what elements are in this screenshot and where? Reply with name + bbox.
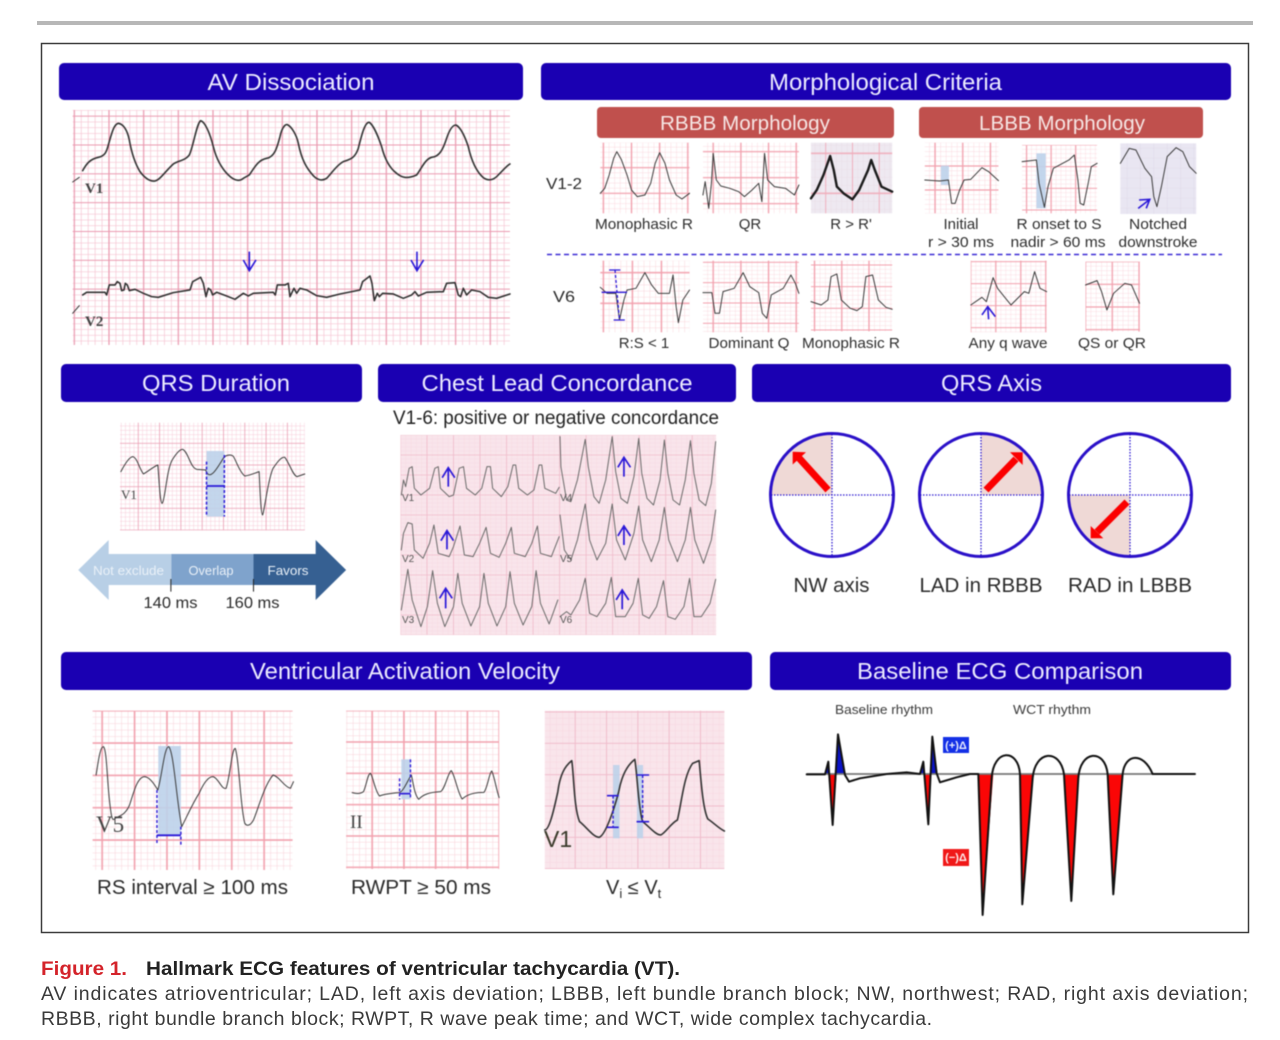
ECG: Monophasic R, V6 RBBB — [811, 261, 892, 331]
label: Monophasic R: Monophasic R — [595, 216, 693, 233]
tag: negative delta: (−)Δ — [945, 852, 967, 864]
heading: QRS Axis: QRS Axis — [941, 370, 1042, 396]
double arrow: QRS duration scale: Favors — [268, 563, 309, 578]
heading: Morphological Criteria: Morphological Criteria — [769, 69, 1002, 95]
heading: Ventricular Activation Velocity — [61, 652, 752, 690]
double arrow: QRS duration scale: 160 ms — [226, 595, 280, 612]
label: R > R': R > R' — [830, 216, 872, 233]
ECG: V1 QRS width: V1 — [121, 487, 137, 502]
panel: QRS duration — [61, 364, 362, 612]
ECG: RS interval, V5: V5 — [96, 812, 124, 837]
axis wheel: LAD in RBBB — [920, 434, 1042, 556]
tag: positive delta — [943, 737, 969, 753]
schematic ECG with positive and negative deltas — [807, 734, 1195, 915]
panel: QRS axis — [752, 364, 1231, 597]
label: Initial r > 30 ms: Initial — [943, 216, 979, 233]
subheading: RBBB Morphology: RBBB Morphology — [660, 113, 830, 135]
panel: ventricular activation velocity — [61, 652, 752, 901]
heading: Morphological Criteria — [541, 63, 1231, 100]
axis wheel: NW axis — [770, 434, 894, 556]
ECG: R > R', V1-2 RBBB — [811, 143, 892, 213]
ECG: RWPT, lead II — [346, 711, 499, 869]
label: R onset to S nadir > 60 ms — [1010, 216, 1106, 251]
label: Vi less than or equal to Vt: i — [619, 886, 622, 901]
panel: morphological criteria — [541, 63, 1231, 352]
12-lead ECG: V1 to V6 concordance: V6 — [560, 615, 573, 626]
divider between V1-2 and V6 rows — [547, 254, 1222, 256]
heading: AV Dissociation: AV Dissociation — [208, 69, 374, 95]
label: RWPT: RWPT ≥ 50 ms — [351, 877, 491, 899]
heading: Baseline ECG Comparison: Baseline ECG Comparison — [857, 658, 1143, 684]
double arrow: QRS duration scale — [78, 540, 346, 612]
ECG: V1 QRS width — [120, 423, 305, 530]
subheading: RBBB Morphology — [597, 107, 894, 138]
label: NW axis: NW axis — [794, 575, 870, 597]
double arrow: QRS duration scale: 140 ms — [144, 595, 198, 612]
double arrow: QRS duration scale: Overlap — [188, 563, 234, 578]
ECG: QS or QR, V6 LBBB — [1086, 262, 1140, 332]
ECG: RS interval, V5 — [93, 711, 293, 870]
panel: chest lead concordance — [378, 364, 736, 635]
12-lead ECG: V1 to V6 concordance — [400, 435, 716, 635]
ECG: RWPT, lead II: II — [350, 812, 363, 833]
12-lead ECG: V1 to V6 concordance: V5 — [560, 554, 573, 565]
label: Notched downstroke: Notched — [1129, 216, 1187, 233]
label: Monophasic R, V6: Monophasic R — [802, 335, 900, 352]
label: Vi less than or equal to Vt: t — [658, 886, 662, 901]
caption — [41, 959, 1248, 1030]
label: Initial r > 30 ms: r > 30 ms — [928, 234, 994, 251]
caption: Figure 1. — [41, 959, 127, 980]
label: RS interval: RS interval ≥ 100 ms — [97, 877, 288, 899]
label: Vi less than or equal to Vt: ≤ V — [622, 877, 658, 899]
ECG: QR, V1-2 RBBB — [703, 143, 799, 213]
12-lead ECG: V1 to V6 concordance: V1 — [402, 493, 415, 504]
label: Baseline rhythm: Baseline rhythm — [835, 702, 933, 717]
ECG: Vi and Vt, V1: V1 — [544, 826, 572, 852]
panel: baseline ECG comparison — [770, 652, 1231, 915]
label: QS or QR: QS or QR — [1078, 335, 1146, 352]
label: QR: QR — [739, 216, 761, 233]
ECG: Any q wave, V6 LBBB — [971, 261, 1047, 332]
row label V6: V6 — [553, 289, 575, 306]
tag: positive delta: (+)Δ — [945, 740, 967, 752]
axis wheel: RAD in LBBB — [1068, 434, 1192, 556]
label: Any q wave: Any q wave — [968, 335, 1048, 352]
ECG: R onset to S nadir, V1-2 LBBB — [1022, 145, 1097, 213]
caption: AV indicates atrioventricular; LAD, left axis deviation; LBBB, left bundle branch block; NW, northwest; RAD, right axis deviation; — [41, 983, 1248, 1005]
heading: AV Dissociation — [59, 63, 523, 100]
ECG: Vi and Vt, V1 — [544, 711, 724, 869]
double arrow: QRS duration scale: Not exclude — [93, 563, 164, 578]
label: WCT rhythm: WCT rhythm — [1013, 702, 1091, 717]
ECG strip: V1 and V2 — [73, 110, 510, 345]
label: RAD in LBBB: RAD in LBBB — [1068, 575, 1192, 597]
ECG: R:S < 1, V6 RBBB — [600, 261, 690, 332]
label: Initial r > 30 ms — [928, 216, 994, 251]
ECG: Monophasic R, V1-2 RBBB — [600, 143, 690, 213]
subtitle: V1-6: positive or negative concordance — [393, 408, 719, 429]
heading: QRS Duration: QRS Duration — [142, 370, 290, 396]
tag: negative delta — [943, 849, 969, 866]
ECG strip: V1 and V2: V1 — [85, 181, 103, 197]
12-lead ECG: V1 to V6 concordance: V4 — [560, 493, 573, 504]
heading: Ventricular Activation Velocity: Ventricular Activation Velocity — [250, 658, 561, 684]
heading: Chest Lead Concordance — [378, 364, 736, 402]
figure panels — [59, 63, 1231, 915]
ECG: Notched downstroke, V1-2 LBBB — [1120, 143, 1196, 214]
ECG: Initial r, V1-2 LBBB — [925, 143, 998, 213]
label: Notched downstroke — [1118, 216, 1198, 251]
heading: Chest Lead Concordance: Chest Lead Concordance — [422, 370, 692, 396]
caption: Hallmark ECG features of ventricular tachycardia (VT). — [146, 959, 680, 980]
label: R:S < 1: R:S < 1 — [619, 335, 669, 352]
heading: Baseline ECG Comparison — [770, 652, 1231, 690]
ECG strip: V1 and V2: V2 — [85, 314, 103, 330]
subheading: LBBB Morphology: LBBB Morphology — [979, 113, 1145, 135]
subheading: LBBB Morphology — [919, 107, 1203, 138]
caption: RBBB, right bundle branch block; RWPT, R wave peak time; and WCT, wide complex tachycardia. — [41, 1008, 932, 1030]
heading: QRS Duration — [61, 364, 362, 402]
label: LAD in RBBB: LAD in RBBB — [920, 575, 1042, 597]
top rule — [37, 21, 1253, 25]
12-lead ECG: V1 to V6 concordance: V3 — [402, 615, 415, 626]
panel: AV dissociation — [59, 63, 523, 345]
label: Vi less than or equal to Vt: V — [606, 877, 619, 899]
12-lead ECG: V1 to V6 concordance: V2 — [402, 554, 415, 565]
label: R onset to S nadir > 60 ms: R onset to S — [1016, 216, 1102, 233]
label: Dominant Q: Dominant Q — [708, 335, 790, 352]
row label V1-2: V1-2 — [546, 176, 582, 193]
ECG: Dominant Q, V6 RBBB — [703, 261, 799, 332]
heading: QRS Axis — [752, 364, 1231, 402]
label: R onset to S nadir > 60 ms: nadir > 60 ms — [1010, 234, 1106, 251]
label: Notched downstroke: downstroke — [1118, 234, 1198, 251]
